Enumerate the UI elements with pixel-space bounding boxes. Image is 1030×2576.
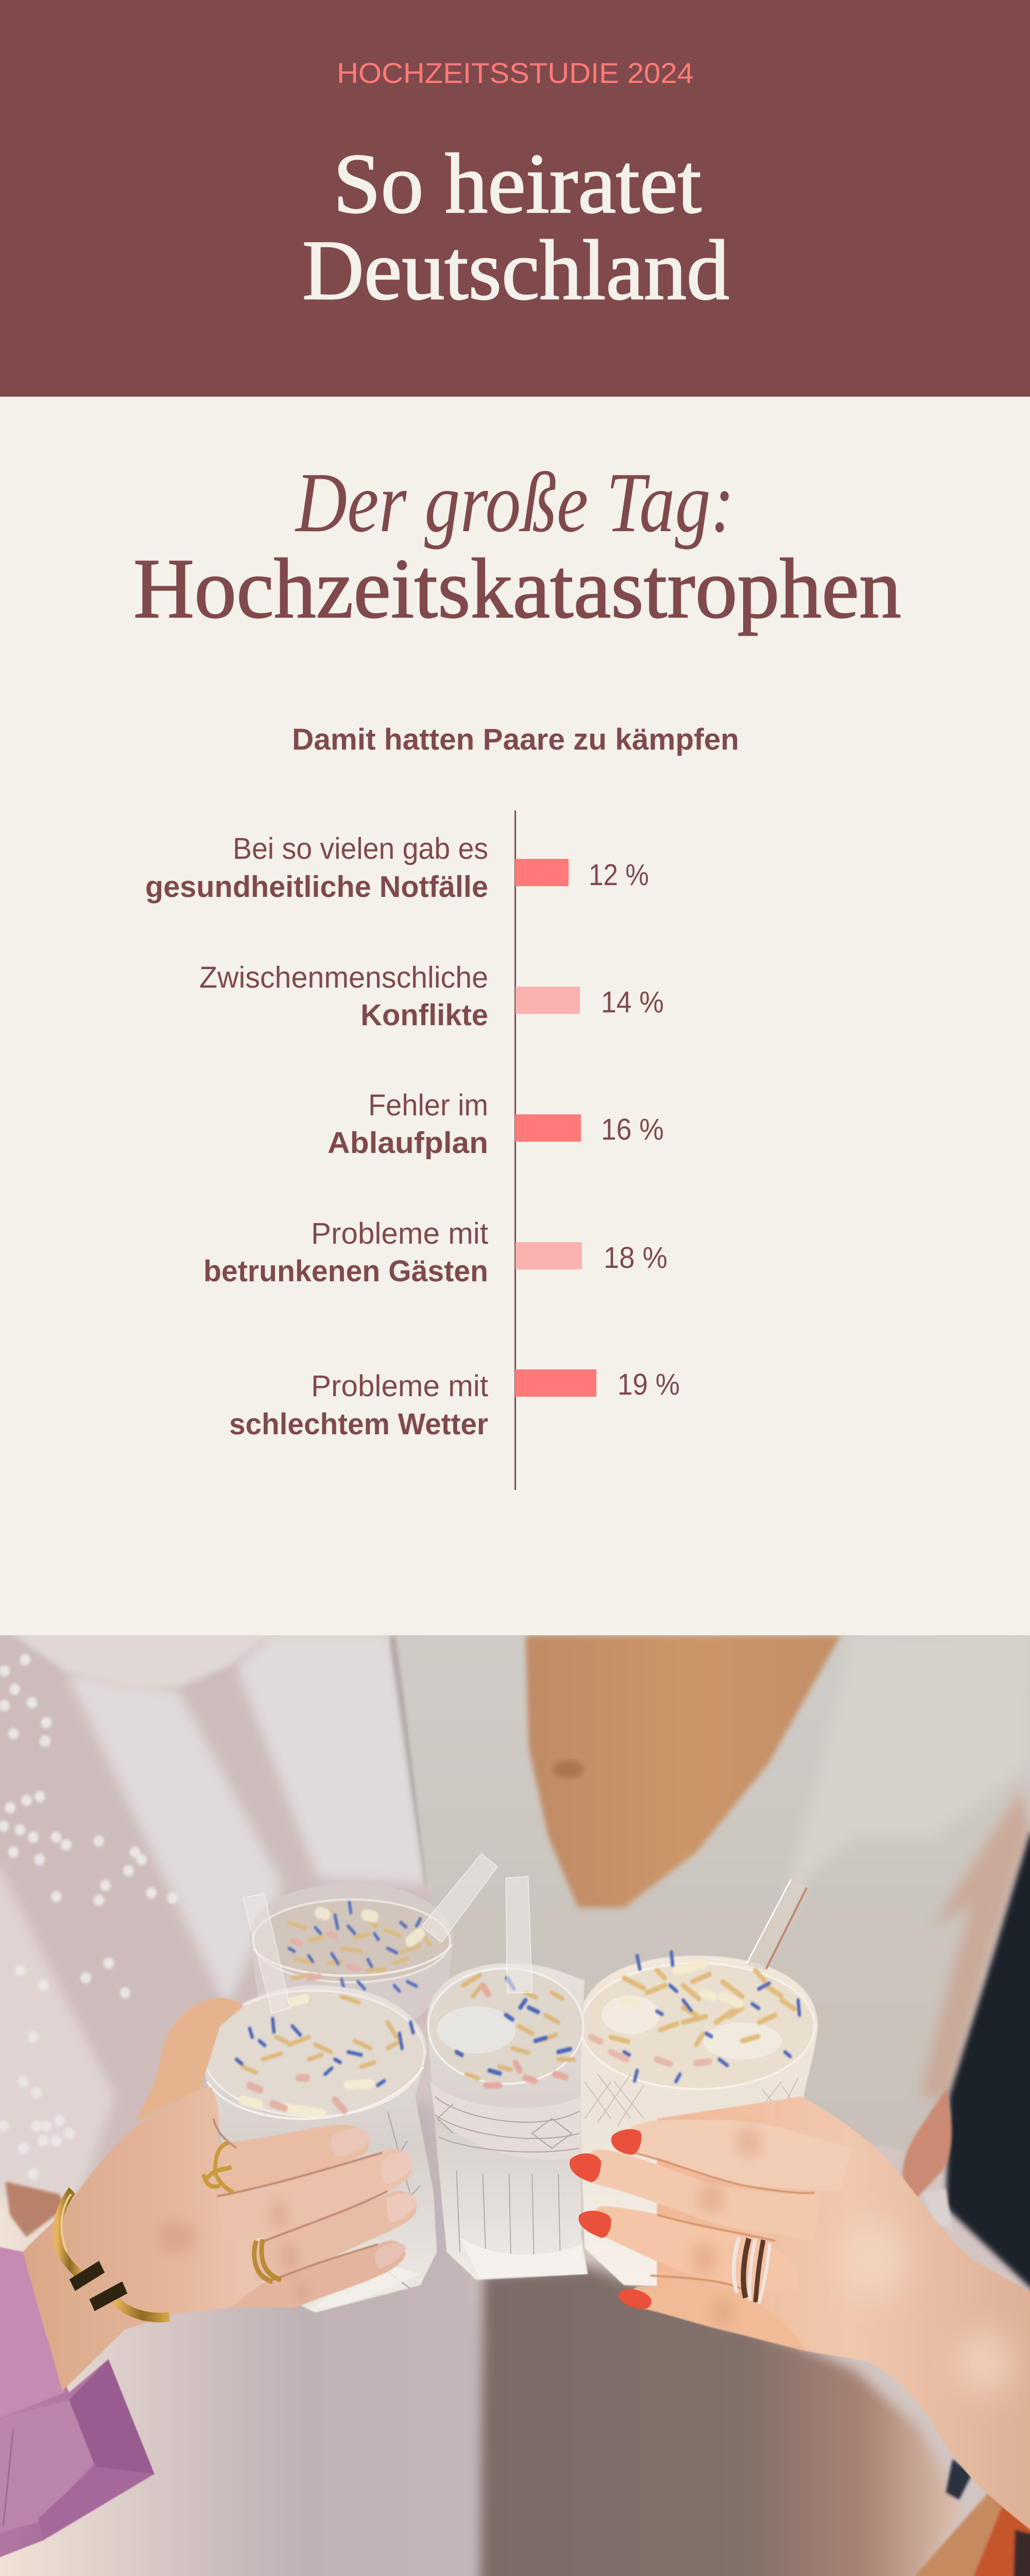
right sleeve hem (923, 2189, 952, 2230)
left hand with rings and bracelet (23, 1998, 417, 2391)
finger one (627, 2120, 851, 2191)
skin gap at left waist (5, 2181, 66, 2237)
row: Konflikte (199, 961, 664, 1032)
red garment and skin at bottom right (916, 2493, 1030, 2576)
flower confetti (456, 1975, 574, 2086)
row: Konflikte: Zwischenmenschliche (199, 961, 488, 994)
row: Konflikte: 14 % (601, 986, 664, 1019)
knuckle shading (691, 2127, 762, 2326)
lower right dress (377, 2267, 1030, 2576)
row: gesundheitliche Notfälle: gesundheitliche Notfälle (145, 870, 488, 904)
finger three (591, 2206, 798, 2293)
background arm at right (903, 2089, 952, 2200)
index finger ring (203, 2143, 233, 2193)
eyebrow: study label: HOCHZEITSSTUDIE 2024 (337, 57, 694, 89)
row: Ablaufplan (328, 1089, 664, 1160)
finger two (585, 2149, 821, 2241)
right hand with red nails and rings (570, 2096, 1030, 2540)
pale wrist highlights (841, 2222, 1015, 2393)
row: Ablaufplan: Ablaufplan (328, 1126, 488, 1160)
flower confetti (289, 1903, 430, 1991)
right dress and neckline (398, 1630, 1030, 2156)
stacked rings (734, 2237, 770, 2303)
right glass (579, 1952, 818, 2289)
panel: header (0, 0, 1030, 397)
photo: four hands toasting with flower-topped glasses (0, 1635, 1030, 2576)
row: gesundheitliche Notfälle: Bei so vielen gab es (233, 832, 488, 866)
fingers (210, 2125, 369, 2196)
heading: section title: Der große Tag: (295, 455, 734, 550)
row: schlechtes Wetter (229, 1368, 680, 1441)
diamond cut band (585, 2074, 801, 2126)
row: betrunkene Gäste: 18 % (604, 1241, 667, 1275)
bar chart (145, 810, 680, 1490)
nails (331, 2128, 369, 2156)
knuckle shading (158, 2201, 310, 2301)
purple blouse sleeve (0, 2246, 154, 2560)
back of hand (23, 2087, 296, 2391)
dark background right (946, 1826, 1030, 2308)
row: betrunkene Gäste (203, 1217, 667, 1288)
row: betrunkene Gäste: betrunkenen Gästen (203, 1255, 488, 1288)
left dress (0, 1623, 499, 2576)
row: schlechtes Wetter: Probleme mit (311, 1369, 488, 1403)
bracelet (57, 2191, 169, 2317)
chart axis (514, 810, 516, 1490)
thumb behind the glass (134, 1998, 243, 2122)
middle glass (427, 1963, 588, 2280)
title (302, 136, 729, 317)
row: Konflikte: Konflikte (360, 998, 488, 1032)
hand and forearm (657, 2096, 1030, 2540)
panel: chart section (133, 455, 901, 1490)
title: Deutschland (302, 223, 729, 317)
red nails (570, 2129, 651, 2309)
title: So heiratet (333, 136, 701, 231)
row: gesundheitliche Notfälle: 12 % (589, 858, 649, 892)
glass straws (243, 1854, 808, 2013)
flower confetti (236, 1996, 413, 2113)
flower confetti (591, 1952, 799, 2081)
row: gesundheitliche Notfälle (145, 832, 649, 904)
row: schlechtes Wetter: schlechtem Wetter (229, 1408, 488, 1441)
heading: section title (133, 455, 901, 636)
ring finger rings (254, 2239, 281, 2281)
row: schlechtes Wetter: 19 % (617, 1368, 680, 1401)
finger four (630, 2286, 808, 2352)
chart heading: Damit hatten Paare zu kämpfen (292, 723, 739, 756)
front left glass (200, 1986, 437, 2313)
heading: section title: Hochzeitskatastrophen (133, 541, 901, 636)
row: betrunkene Gäste: Probleme mit (311, 1217, 488, 1250)
row: Ablaufplan: Fehler im (368, 1089, 488, 1122)
back left glass (250, 1883, 453, 2037)
row: Ablaufplan: 16 % (601, 1113, 664, 1146)
